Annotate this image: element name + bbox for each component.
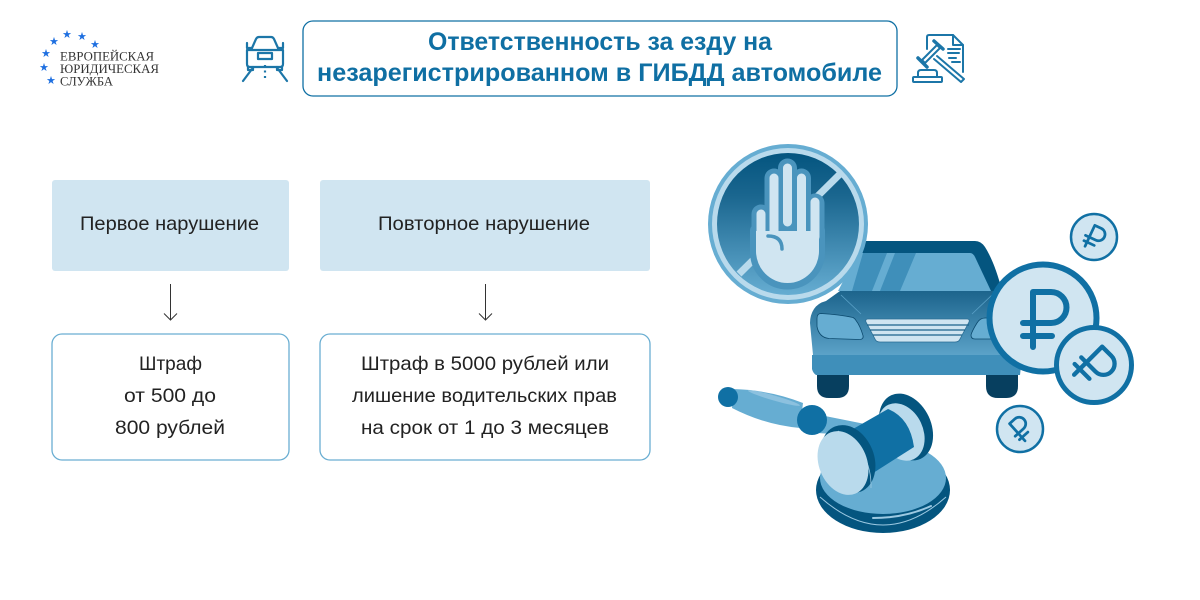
- arrow: [479, 284, 492, 320]
- logo stars: ★: [62, 30, 72, 40]
- coin: small top: [1071, 214, 1117, 260]
- stop sign with hand: [708, 144, 868, 304]
- coin: small bottom: [997, 406, 1043, 452]
- heading: repeat violation: Повторное нарушение: [378, 213, 590, 235]
- hand: [755, 168, 820, 284]
- title box: [303, 21, 897, 96]
- title: [317, 28, 882, 87]
- grille: [866, 319, 969, 342]
- title: незарегистрированном в ГИБДД автомобиле: [317, 59, 882, 87]
- title: Ответственность за езду на: [428, 28, 773, 56]
- heading: first violation: [52, 180, 289, 271]
- text block: repeat penalty: Штраф в 5000 рублей или: [361, 353, 609, 375]
- heading: first violation: Первое нарушение: [80, 213, 259, 235]
- text block: first penalty: от 500 до: [124, 385, 216, 407]
- panel: repeat violation: [320, 180, 650, 460]
- logo: [39, 30, 159, 88]
- text block: first penalty: [52, 334, 289, 460]
- text block: repeat penalty: на срок от 1 до 3 месяцев: [361, 417, 609, 439]
- illustration: car, stop sign, coins and gavel: [708, 144, 1132, 533]
- logo stars: ★: [90, 40, 100, 50]
- arrow: [164, 284, 177, 320]
- text block: first penalty: Штраф: [139, 353, 202, 375]
- gavel head: [808, 385, 943, 503]
- text block: repeat penalty: [320, 334, 650, 460]
- text block: repeat penalty: лишение водительских прав: [352, 385, 617, 407]
- car: [810, 241, 1022, 398]
- icon: gavel and document: [913, 35, 964, 82]
- logo stars: ★: [46, 76, 56, 86]
- logo name: ЮРИДИЧЕСКАЯ: [60, 62, 159, 76]
- text block: first penalty: 800 рублей: [115, 417, 225, 439]
- logo stars: ★: [77, 32, 87, 42]
- panel: first violation: [52, 180, 289, 460]
- gavel base: [816, 442, 950, 533]
- coin: medium: [1056, 328, 1132, 402]
- coin: large: [990, 264, 1096, 372]
- logo name: ЕВРОПЕЙСКАЯ: [60, 50, 154, 64]
- logo stars: ★: [49, 36, 59, 46]
- logo name: [60, 50, 159, 88]
- headlight: [817, 314, 863, 340]
- gavel handle: [718, 387, 865, 435]
- gavel: [718, 385, 950, 533]
- logo stars: ★: [41, 48, 51, 58]
- heading: repeat violation: [320, 180, 650, 271]
- logo name: СЛУЖБА: [60, 74, 113, 88]
- logo stars: [39, 30, 100, 86]
- icon: car on road: [243, 37, 287, 81]
- logo stars: ★: [39, 62, 49, 72]
